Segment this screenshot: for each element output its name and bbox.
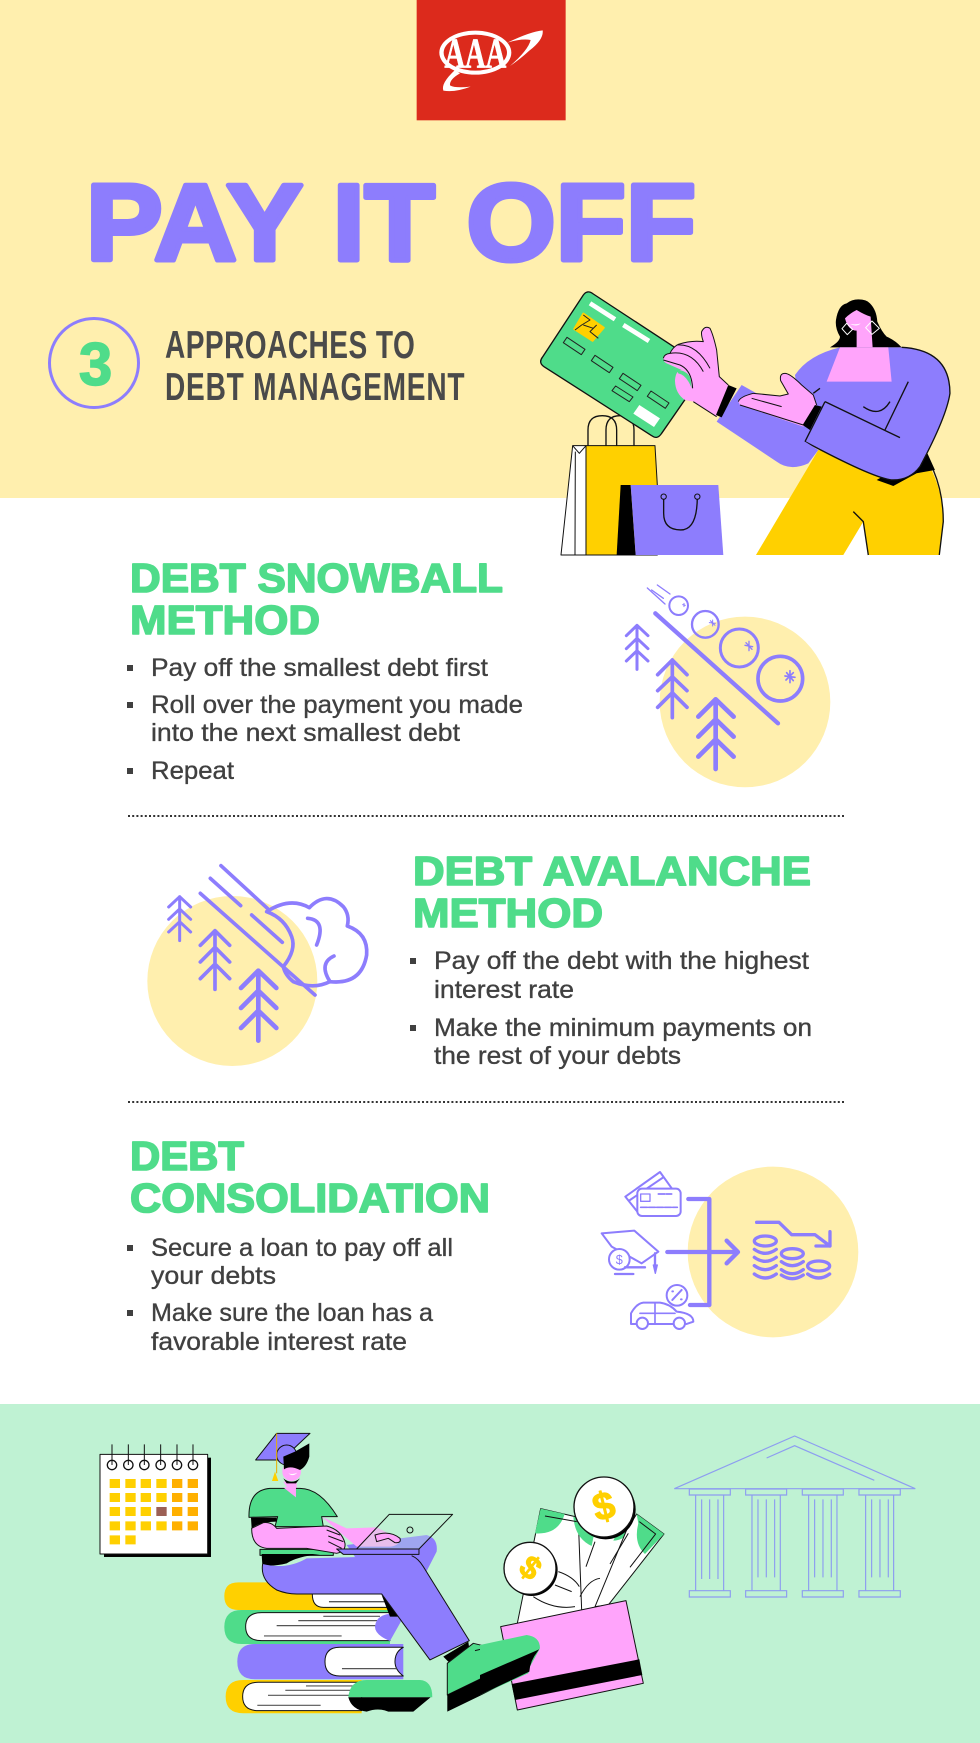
- header background: [0, 0, 980, 498]
- bullet list: Roll over the payment you made: [151, 691, 523, 719]
- panel: debt consolidation: [127, 1133, 858, 1356]
- heading: [130, 555, 503, 643]
- bullet list: [410, 947, 812, 1070]
- icon: shopping bags: [561, 416, 723, 555]
- bullet list: [127, 1234, 453, 1356]
- heading: [413, 848, 811, 936]
- student figure: [249, 1433, 540, 1712]
- subtitle: [165, 324, 465, 409]
- heading: DEBT SNOWBALL: [130, 555, 503, 601]
- icon: snowball rolling downhill: [626, 585, 830, 787]
- heading: METHOD: [413, 890, 603, 936]
- bullet list: Pay off the smallest debt first: [151, 654, 488, 682]
- bullet list: Make sure the loan has a: [151, 1299, 433, 1327]
- shoe overlap: [480, 1635, 540, 1695]
- title: PAY IT OFF: [86, 162, 696, 284]
- heading: DEBT AVALANCHE: [413, 848, 811, 894]
- bullet list: [127, 654, 523, 785]
- divider: [128, 1101, 845, 1103]
- bullet list: favorable interest rate: [151, 1328, 407, 1356]
- bullet list: Pay off the debt with the highest: [434, 947, 809, 975]
- heading: METHOD: [130, 597, 320, 643]
- panel: debt avalanche method: [147, 848, 812, 1070]
- number badge: [50, 318, 138, 408]
- bullet list: interest rate: [434, 976, 574, 1004]
- subtitle: DEBT MANAGEMENT: [165, 366, 465, 409]
- AAA logo: AAA: [444, 32, 507, 78]
- bullet list: Repeat: [151, 757, 234, 785]
- divider: [128, 815, 845, 817]
- illustration: student on books with laptop: [100, 1433, 540, 1713]
- icon: dollar coins: [504, 1477, 636, 1596]
- woman hands: [663, 327, 822, 430]
- bullet list: Secure a loan to pay off all: [151, 1234, 453, 1262]
- illustration: wallet with cash and coins: [480, 1477, 664, 1710]
- icon: stack of books: [224, 1582, 403, 1713]
- subtitle: APPROACHES TO: [165, 324, 415, 367]
- AAA logo: [417, 0, 566, 120]
- woman body: [717, 299, 950, 555]
- icon: banknotes: [517, 1509, 664, 1623]
- icon: avalanche: [147, 866, 367, 1066]
- panel: debt snowball method: [127, 555, 830, 787]
- icon: dollar coins: $: [588, 1483, 620, 1530]
- heading: DEBT: [130, 1133, 244, 1179]
- number badge: 3: [79, 331, 112, 398]
- bullet list: the rest of your debts: [434, 1042, 681, 1070]
- icon: credit card: [541, 292, 707, 437]
- icon: debts merging into one loan: [602, 1167, 858, 1337]
- footer background: [0, 1404, 980, 1743]
- icon: dollar coins: $: [513, 1548, 549, 1587]
- bullet list: Make the minimum payments on: [434, 1014, 812, 1042]
- heading: [130, 1133, 490, 1221]
- icon: calendar: [100, 1444, 211, 1557]
- icon: bank building: [674, 1436, 915, 1597]
- icon: debts merging into one loan: $: [616, 1253, 623, 1267]
- bullet list: your debts: [151, 1262, 276, 1290]
- heading: CONSOLIDATION: [130, 1175, 490, 1221]
- icon: laptop: [337, 1514, 453, 1554]
- bullet list: into the next smallest debt: [151, 719, 460, 747]
- icon: wallet: [501, 1601, 643, 1710]
- illustration: woman with credit card and shopping bags: [541, 292, 950, 555]
